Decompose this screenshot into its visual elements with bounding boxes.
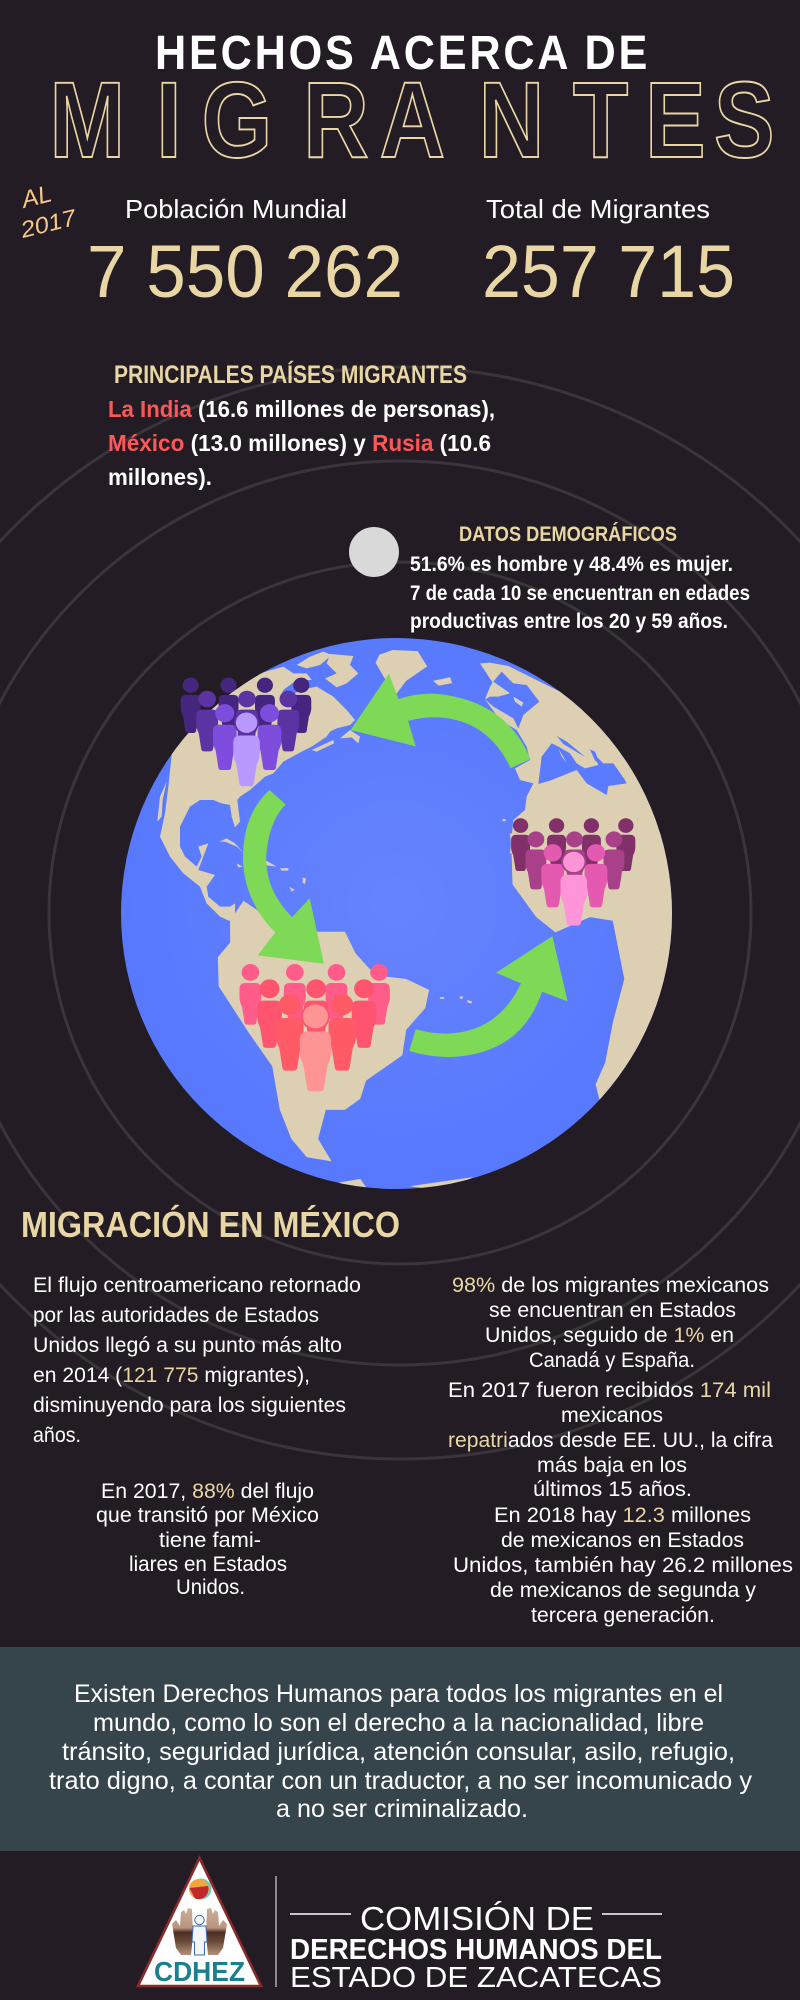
stat: total de migrantes: Total de Migrantes: [486, 194, 710, 224]
text block: flujo centroamericano: [33, 1274, 361, 1447]
text block: migrantes mexicanos: Unidos, también hay 26.2 millones: [453, 1554, 793, 1577]
panel: derechos humanos: Existen Derechos Humanos para todos los migrantes en el: [74, 1680, 723, 1708]
globe: [121, 638, 683, 1192]
wordmark: comisión de derechos humanos: COMISIÓN DE: [360, 1900, 594, 1937]
text block: flujo centroamericano: disminuyendo para los siguientes: [33, 1394, 346, 1417]
stat: población mundial: Población Mundial: [125, 194, 347, 224]
orbit rings: [0, 367, 800, 1459]
wordmark: comisión de derechos humanos: ESTADO DE ZACATECAS: [290, 1962, 662, 1994]
text block: datos demográficos: 51.6% es hombre y 48.4% es mujer.: [410, 553, 733, 576]
europe and north africa: [480, 663, 683, 853]
arrow: south america to africa: [409, 936, 568, 1057]
tag: al 2017: AL: [17, 180, 55, 214]
text block: migrantes mexicanos: tercera generación.: [531, 1604, 715, 1627]
text block: flujo centroamericano: en 2014 (121 775 migrantes),: [33, 1364, 310, 1387]
wordmark: comisión de derechos humanos: DERECHOS HUMANOS DEL: [290, 1934, 662, 1966]
logo: cdhez triangle: CDHEZ: [154, 1956, 245, 1987]
panel: derechos humanos: tránsito, seguridad jurídica, atención consular, asilo, refugio,: [62, 1738, 735, 1766]
icon: person: [192, 1915, 207, 1955]
title: hechos acerca de: HECHOS ACERCA DE: [155, 26, 647, 80]
text block: migrantes mexicanos: últimos 15 años.: [533, 1478, 692, 1501]
panel: derechos humanos: trato digno, a contar con un traductor, a no ser incomunicado y: [49, 1767, 752, 1795]
icon: hands: [172, 1908, 227, 1955]
wordmark: comisión de derechos humanos: [290, 1900, 662, 1994]
text block: migrantes mexicanos: más baja en los: [537, 1454, 687, 1477]
icon: purple people group: [181, 678, 311, 786]
stat: población mundial: 7 550 262: [87, 230, 403, 313]
text block: migrantes mexicanos: [448, 1274, 793, 1627]
text block: datos demográficos: productivas entre los 20 y 59 años.: [410, 610, 728, 633]
panel: derechos humanos: mundo, como lo son el derecho a la nacionalidad, libre: [93, 1709, 704, 1737]
divider: logo separator: [275, 1876, 277, 1987]
text block: datos demográficos: [410, 523, 750, 633]
text block: principales países migrantes: [108, 360, 495, 490]
text block: migrantes mexicanos: En 2017 fueron recibidos 174 mil: [448, 1379, 771, 1402]
tag: al 2017: 2017: [17, 204, 80, 243]
title: migrantes outlined: MIGRANTES: [50, 61, 775, 181]
heading: migración en méxico: MIGRACIÓN EN MÉXICO: [21, 1203, 400, 1245]
icon: magenta people group: [511, 818, 635, 926]
text block: datos demográficos: 7 de cada 10 se encuentran en edades: [410, 582, 750, 605]
panel: derechos humanos: [0, 1647, 800, 1851]
text block: flujo centroamericano: años.: [33, 1424, 81, 1447]
arrow: north america to south america: [243, 790, 324, 964]
text block: flujo centroamericano: El flujo centroamericano retornado: [33, 1274, 361, 1297]
text block: 88% del flujo: En 2017, 88% del flujo: [101, 1480, 314, 1503]
text block: principales países migrantes: La India (16.6 millones de personas),: [108, 396, 495, 422]
text block: flujo centroamericano: Unidos llegó a su punto más alto: [33, 1334, 342, 1357]
logo: cdhez triangle: [138, 1858, 261, 1987]
moon: [349, 527, 399, 577]
text block: 88% del flujo: Unidos.: [176, 1576, 245, 1599]
text block: principales países migrantes: PRINCIPALES PAÍSES MIGRANTES: [114, 360, 467, 389]
text block: migrantes mexicanos: 98% de los migrantes mexicanos: [452, 1274, 769, 1297]
north america: [153, 652, 360, 923]
tag: al 2017: [17, 180, 80, 243]
panel: derechos humanos: a no ser criminalizado.: [276, 1795, 528, 1823]
text block: migrantes mexicanos: se encuentran en Estados: [489, 1299, 736, 1322]
stat: total de migrantes: 257 715: [482, 230, 735, 313]
text block: migrantes mexicanos: de mexicanos de segunda y: [490, 1579, 756, 1602]
text block: 88% del flujo: que transitó por México: [96, 1504, 319, 1527]
arrow: europe to north america: [351, 674, 531, 768]
text block: migrantes mexicanos: mexicanos: [561, 1404, 663, 1427]
text block: 88% del flujo: tiene fami-: [159, 1529, 261, 1552]
text block: migrantes mexicanos: repatriados desde EE. UU., la cifra: [448, 1429, 773, 1452]
text block: 88% del flujo: liares en Estados: [129, 1553, 287, 1576]
stat: total de migrantes: [482, 194, 735, 313]
text block: migrantes mexicanos: Canadá y España.: [529, 1349, 695, 1372]
text block: migrantes mexicanos: En 2018 hay 12.3 millones: [494, 1504, 751, 1527]
greenland and south america: [218, 650, 682, 1192]
text block: datos demográficos: DATOS DEMOGRÁFICOS: [459, 523, 677, 546]
text block: principales países migrantes: México (13.0 millones) y Rusia (10.6: [108, 430, 491, 456]
stat: población mundial: [87, 194, 403, 313]
icon: coral people group: [239, 964, 390, 1091]
text block: flujo centroamericano: por las autoridades de Estados: [33, 1304, 319, 1327]
text block: 88% del flujo: [96, 1480, 319, 1599]
text block: migrantes mexicanos: de mexicanos en Estados: [501, 1529, 744, 1552]
icon: sun: [189, 1878, 212, 1900]
text block: principales países migrantes: millones).: [108, 464, 212, 490]
text block: migrantes mexicanos: Unidos, seguido de 1% en: [485, 1324, 734, 1347]
